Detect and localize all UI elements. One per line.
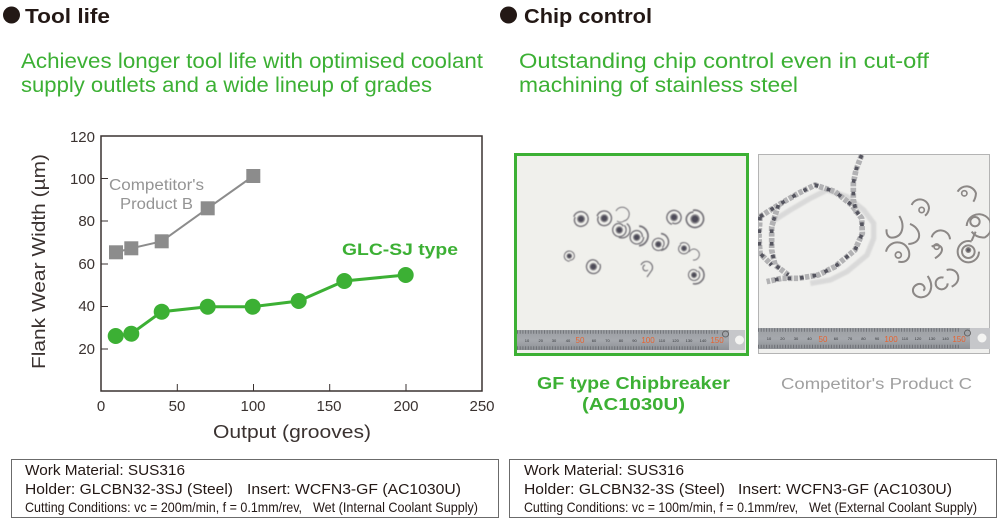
ruler: 80 — [861, 336, 866, 341]
x axis labels: 200 — [393, 398, 419, 415]
ruler: 80 — [619, 338, 624, 343]
ruler: 60 — [834, 336, 839, 341]
ruler: 50 — [576, 336, 585, 345]
line chart: flank wear width vs output — [29, 129, 495, 442]
y axis title: Flank Wear Width (µm) — [29, 154, 49, 369]
plot frame and ticks — [101, 136, 482, 391]
ruler: 110 — [902, 336, 909, 341]
ruler: 60 — [592, 338, 597, 343]
chips: open spirals — [886, 186, 991, 297]
x axis labels: 250 — [469, 398, 495, 415]
label: GLC-SJ type: GLC-SJ type — [342, 240, 458, 259]
y axis labels: 40 — [78, 298, 95, 315]
conditions box: chip control test: Holder: GLCBN32-3S (Steel) — [524, 482, 725, 498]
ruler: 30 — [552, 338, 557, 343]
x axis labels: 100 — [240, 398, 266, 415]
ruler: 140 — [942, 336, 950, 341]
photo: GF type chipbreaker chips — [516, 154, 748, 354]
chip: long snarled chain shadow — [772, 190, 874, 283]
x axis labels — [97, 398, 495, 415]
ruler — [758, 328, 990, 349]
ruler: 30 — [794, 336, 799, 341]
label: competitor's product B: Competitor's — [109, 177, 204, 194]
ruler: 90 — [875, 336, 880, 341]
subheading: tool life summary: supply outlets and a wide lineup of grades — [21, 74, 432, 97]
conditions box: chip control test: Cutting Conditions: vc = 100m/min, f = 0.1mm/rev, — [524, 499, 798, 515]
ruler: 20 — [780, 336, 785, 341]
subheading: chip control summary: Outstanding chip control even in cut-off — [519, 50, 929, 73]
subheading: tool life summary: Achieves longer tool life with optimised coolant — [21, 50, 483, 73]
chip: long snarled chain — [759, 155, 862, 282]
caption: GF type chipbreaker: (AC1030U) — [582, 394, 685, 414]
ruler: 120 — [672, 338, 680, 343]
label: competitor's product B — [109, 177, 204, 213]
subheading: chip control summary — [519, 50, 929, 97]
conditions box: tool life test: Holder: GLCBN32-3SJ (Steel) — [25, 482, 233, 498]
chips: small tight spirals — [563, 207, 707, 284]
ruler: 110 — [659, 338, 666, 343]
x axis labels: 50 — [169, 398, 185, 415]
conditions box: chip control test: Insert: WCFN3-GF (AC1030U) — [738, 482, 952, 498]
y axis labels: 60 — [78, 256, 95, 273]
y axis labels: 100 — [70, 171, 95, 188]
conditions box: tool life test: Work Material: SUS316 — [25, 463, 185, 479]
ruler: 50 — [819, 335, 828, 344]
x axis labels: 0 — [97, 398, 105, 415]
ruler: 10 — [767, 336, 772, 341]
conditions box: tool life test: Wet (Internal Coolant Supply) — [313, 499, 478, 515]
conditions box: tool life test: Insert: WCFN3-GF (AC1030U) — [247, 482, 461, 498]
ruler: 120 — [915, 336, 922, 341]
series: competitor's product B — [109, 169, 260, 259]
caption: GF type chipbreaker: GF type Chipbreaker — [537, 373, 730, 393]
photo: competitor's product C chips — [758, 154, 991, 354]
conditions box: chip control test: Work Material: SUS316 — [524, 463, 684, 479]
series: GLC-SJ type — [108, 267, 414, 344]
conditions box: chip control test: Wet (External Coolant Supply) — [809, 499, 977, 515]
section heading: tool life: Tool life — [25, 6, 110, 28]
ruler: 70 — [605, 338, 610, 343]
ruler: 40 — [566, 338, 571, 343]
y axis labels: 120 — [70, 129, 95, 146]
section heading: chip control: Chip control — [524, 6, 652, 28]
ruler: 90 — [632, 338, 637, 343]
ruler: 130 — [929, 336, 936, 341]
ruler: 40 — [807, 336, 812, 341]
ruler: 140 — [700, 338, 707, 343]
conditions box: tool life test — [12, 460, 498, 518]
caption: GF type chipbreaker — [537, 373, 730, 414]
ruler: 70 — [848, 336, 853, 341]
conditions box: tool life test: Cutting Conditions: vc = 200m/min, f = 0.1mm/rev, — [25, 499, 302, 515]
y axis labels: 80 — [78, 213, 95, 230]
conditions box: chip control test — [510, 460, 996, 518]
x axis labels: 150 — [316, 398, 342, 415]
ruler: 130 — [686, 338, 693, 343]
ruler: 100 — [884, 335, 898, 344]
ruler: 150 — [952, 335, 966, 344]
caption: competitor's product C: Competitor's Product C — [781, 376, 972, 393]
ruler: 150 — [710, 336, 724, 345]
y axis labels: 20 — [78, 341, 95, 358]
ruler — [517, 330, 745, 350]
subheading: tool life summary — [21, 50, 483, 97]
subheading: chip control summary: machining of stainless steel — [519, 74, 798, 97]
x axis title: Output (grooves) — [213, 422, 371, 442]
y axis labels — [70, 129, 95, 358]
ruler: 20 — [538, 338, 544, 343]
label: competitor's product B: Product B — [120, 196, 193, 213]
ruler: 100 — [641, 336, 655, 345]
ruler: 10 — [525, 338, 530, 343]
